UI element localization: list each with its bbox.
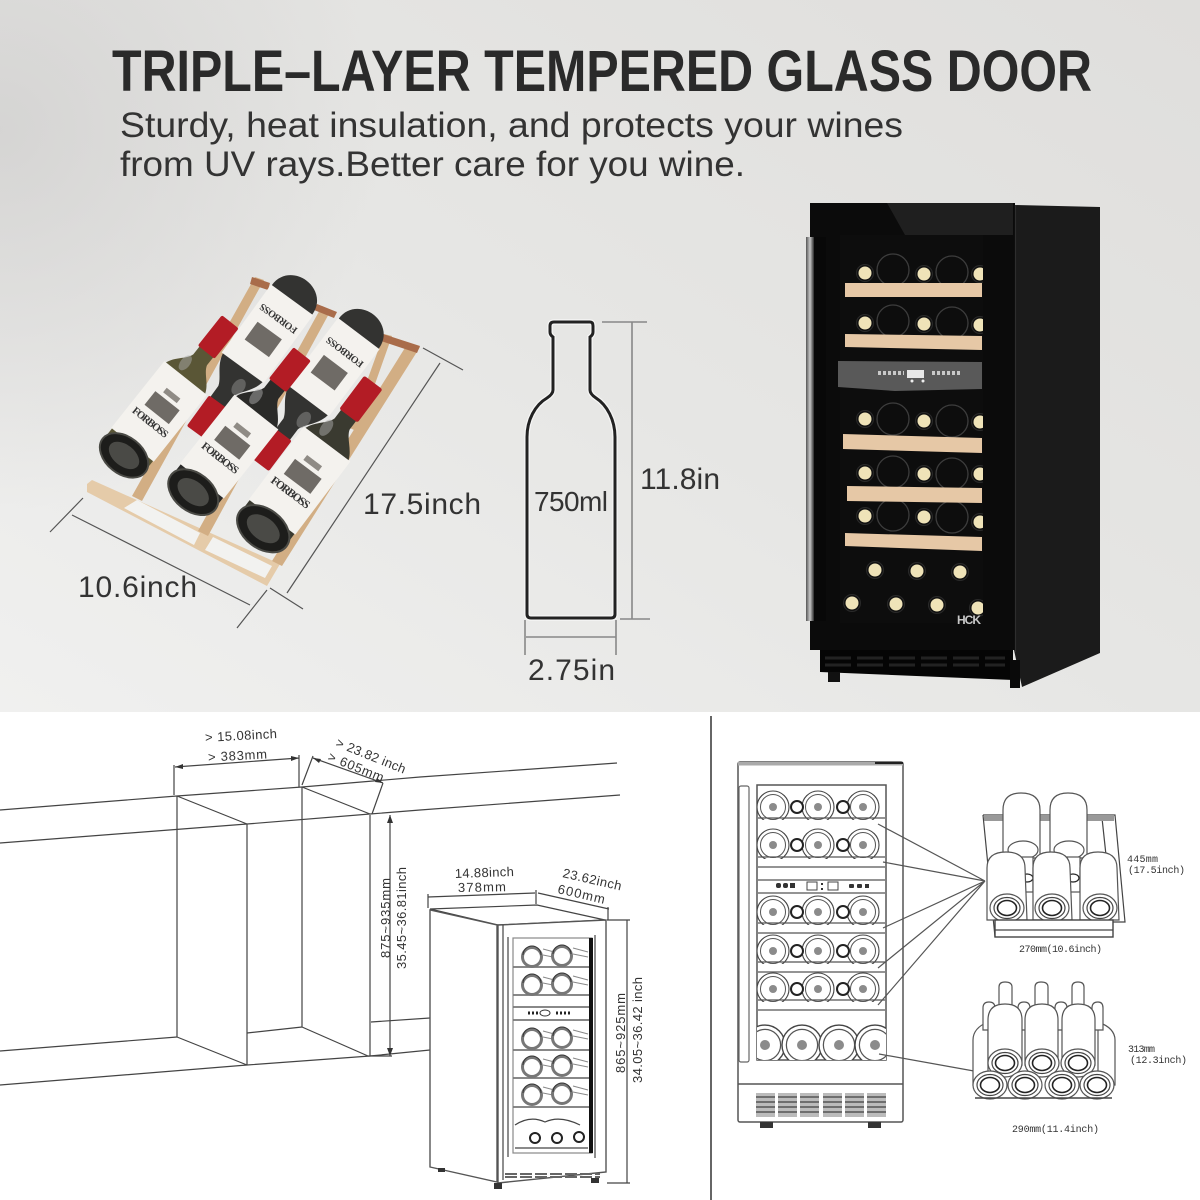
wooden shelves <box>843 283 982 551</box>
cooler width dimension: 14.88inch <box>455 864 514 881</box>
rack dimension: 17.5inch: 17.5inch <box>363 488 481 521</box>
wooden rack frame <box>87 277 420 586</box>
upper necks <box>999 982 1084 1005</box>
cooler height dimension: 34.05~36.42 inch <box>630 977 645 1083</box>
cooler glass window <box>838 235 988 627</box>
bottle: back left: FORBOSS <box>257 300 300 335</box>
cooler handle <box>806 237 826 621</box>
cooler height dimension <box>607 920 645 1183</box>
niche height dimension: 35.45~36.81inch <box>394 867 409 969</box>
bottle: front right <box>228 365 397 562</box>
cooler body outline <box>430 905 606 1189</box>
shelf detail: three plus two bottles rack <box>983 793 1185 956</box>
control display panel <box>838 361 982 391</box>
cooler height dimension: 865~925mm <box>613 993 628 1073</box>
wine rack photo with six bottles <box>87 265 420 586</box>
niche height dimension <box>368 815 409 1056</box>
white lower section <box>0 712 1200 1200</box>
front view control panel <box>776 882 869 890</box>
front view window and bottle rows <box>756 784 887 1061</box>
cooler base and vents <box>820 650 1020 688</box>
rack dimension: 10.6inch <box>50 498 267 628</box>
cabinet niche installation drawing <box>0 726 620 1085</box>
subtitle text block: from UV rays.Better care for you wine. <box>120 145 745 184</box>
bottle: front middle <box>159 337 324 524</box>
shelf detail: three plus two bottles rack: (17.5inch) <box>1128 865 1185 877</box>
cooler width dimension <box>428 864 536 908</box>
front view cabinet outline <box>738 762 903 1128</box>
subtitle text block: Sturdy, heat insulation, and protects your wines <box>120 106 903 145</box>
front bottles <box>987 852 1119 920</box>
cooler depth dimension: 600mm <box>556 881 606 907</box>
niche width dimension <box>174 726 299 795</box>
front view line drawing <box>738 762 985 1128</box>
cooler base vent <box>505 1174 600 1177</box>
bottle width dimension: 2.75in: 2.75in <box>528 654 615 687</box>
rack dimensions text: 445mm <box>1127 855 1158 866</box>
cooler door <box>810 203 1015 650</box>
cooler window with shelves and bottles <box>513 938 593 1153</box>
niche width dimension: > 15.08inch <box>205 726 277 745</box>
niche depth dimension: > 23.82 inch <box>334 735 408 777</box>
bottle outline with 750ml: 750ml <box>534 486 608 517</box>
tray front <box>995 920 1113 937</box>
wine cooler photo <box>806 203 1100 688</box>
cooler line drawing in perspective <box>428 864 645 1189</box>
niche cut-out lines <box>177 787 370 1065</box>
subtitle text block <box>120 106 903 184</box>
bottle outline with 750ml <box>527 322 615 618</box>
background: gray upper section <box>0 0 1200 712</box>
bottle height dimension: 11.8in <box>602 322 720 619</box>
bottle: back left <box>175 265 327 448</box>
rear bottles <box>1003 793 1087 859</box>
bottle width dimension: 2.75in <box>525 620 616 687</box>
cooler depth dimension: 23.62inch <box>561 865 623 893</box>
rack dimension: 17.5inch <box>270 348 481 609</box>
bottle: back right: FORBOSS <box>324 334 366 369</box>
leader lines to shelf details <box>878 824 985 1073</box>
base line <box>975 1097 1112 1099</box>
outer lower bottles <box>973 1002 1115 1085</box>
necks between bottles <box>1020 857 1080 892</box>
stack dimensions text: 313mm <box>1128 1045 1155 1056</box>
bottle: front left <box>91 305 252 487</box>
niche height dimension: 875~935mm <box>378 878 393 958</box>
bottle: front left: FORBOSS <box>130 405 171 441</box>
upper bottles <box>988 1004 1095 1065</box>
bottle: back right <box>239 299 394 480</box>
bottle height dimension: 11.8in: 11.8in <box>640 463 720 496</box>
wall and counter lines <box>0 763 620 1085</box>
niche depth dimension: > 605mm <box>326 749 386 785</box>
cooler width dimension: 378mm <box>458 879 506 895</box>
vertical divider <box>710 716 712 1200</box>
shelf detail: stacked bottles at bottom: (12.3inch) <box>1130 1055 1187 1067</box>
shelf detail: stacked bottles at bottom: 290mm(11.4inch) <box>1012 1124 1099 1136</box>
rack dimension: 10.6inch: 10.6inch <box>78 571 197 604</box>
brand mark: HCK <box>957 613 981 627</box>
cooler depth dimension <box>538 865 623 920</box>
front view vents <box>756 1093 886 1117</box>
rack frame <box>983 815 1125 937</box>
shelf detail: stacked bottles at bottom <box>973 982 1187 1136</box>
cooler side panel <box>1014 205 1100 687</box>
niche width dimension: > 383mm <box>208 746 267 765</box>
shelf detail: three plus two bottles rack: 270mm(10.6inch) <box>1019 944 1102 956</box>
niche depth dimension <box>302 735 408 814</box>
bottle: front middle: FORBOSS <box>199 440 241 477</box>
bottle: front right: FORBOSS <box>268 475 312 512</box>
